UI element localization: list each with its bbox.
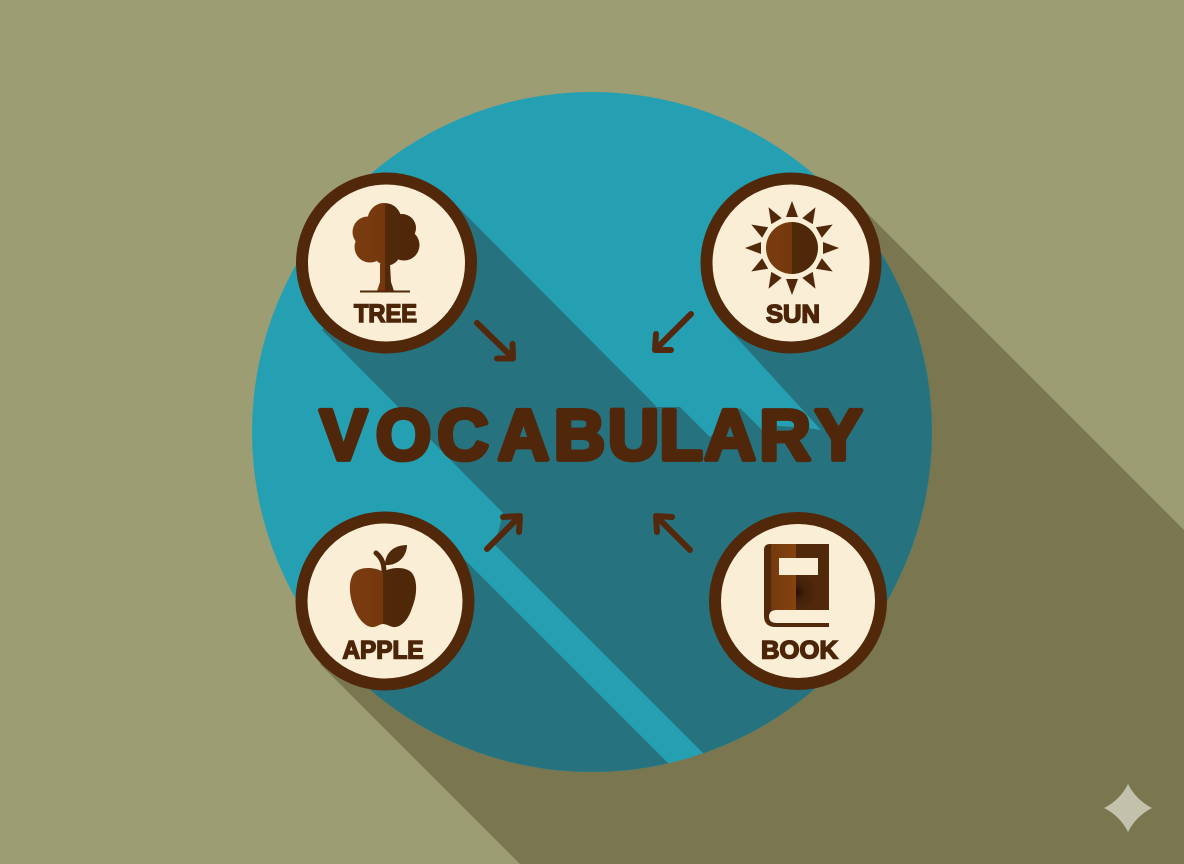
- icon: sparkle watermark: [1104, 784, 1152, 832]
- arrow: book to title: [656, 516, 690, 550]
- label: APPLE: APPLE: [342, 636, 424, 664]
- badge: apple: [302, 518, 468, 684]
- label: TREE: TREE: [354, 300, 417, 328]
- icon: apple: [350, 545, 416, 627]
- large teal circle: [252, 92, 932, 772]
- icon: sun: [745, 201, 839, 295]
- arrow: sun to title: [655, 314, 691, 350]
- label: BOOK: BOOK: [761, 636, 838, 664]
- label: SUN: SUN: [766, 300, 820, 328]
- long shadow on background: [320, 201, 1184, 864]
- title: VOCABULARY: VOCABULARY: [320, 396, 862, 476]
- icon: book: [764, 544, 829, 627]
- infographic canvas: [252, 92, 1184, 864]
- badge: book: [715, 518, 881, 684]
- badge: sun: [706, 178, 876, 348]
- long shadows on teal circle: [322, 204, 932, 772]
- icon: tree: [352, 203, 420, 292]
- arrow: apple to title: [487, 516, 520, 549]
- arrow: tree to title: [477, 323, 513, 358]
- badge: tree: [302, 178, 471, 348]
